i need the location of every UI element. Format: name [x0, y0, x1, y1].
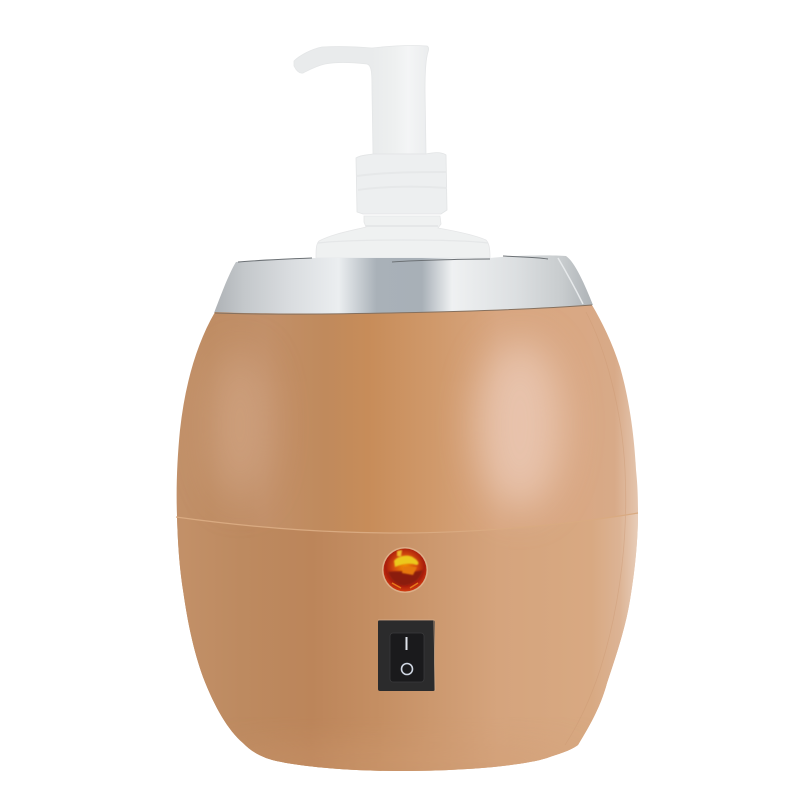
- chrome ring: [214, 255, 593, 314]
- body highlights: [478, 340, 562, 510]
- rocker switch: [378, 620, 435, 691]
- indicator light: [382, 547, 428, 593]
- rocker button: [390, 633, 424, 682]
- pump collar: [356, 153, 447, 214]
- lower body half: [170, 513, 640, 780]
- pump neck and cap: [316, 216, 490, 258]
- body seam: [176, 513, 638, 533]
- pump dispenser: [294, 46, 490, 258]
- chrome lower edge: [215, 305, 592, 314]
- pump nozzle and stem: [294, 46, 429, 154]
- barrel body: [170, 305, 640, 781]
- right rim band: [592, 326, 626, 682]
- off symbol: [402, 664, 412, 674]
- product illustration: lotion warmer dispenser: [176, 45, 638, 771]
- on symbol: [406, 637, 408, 650]
